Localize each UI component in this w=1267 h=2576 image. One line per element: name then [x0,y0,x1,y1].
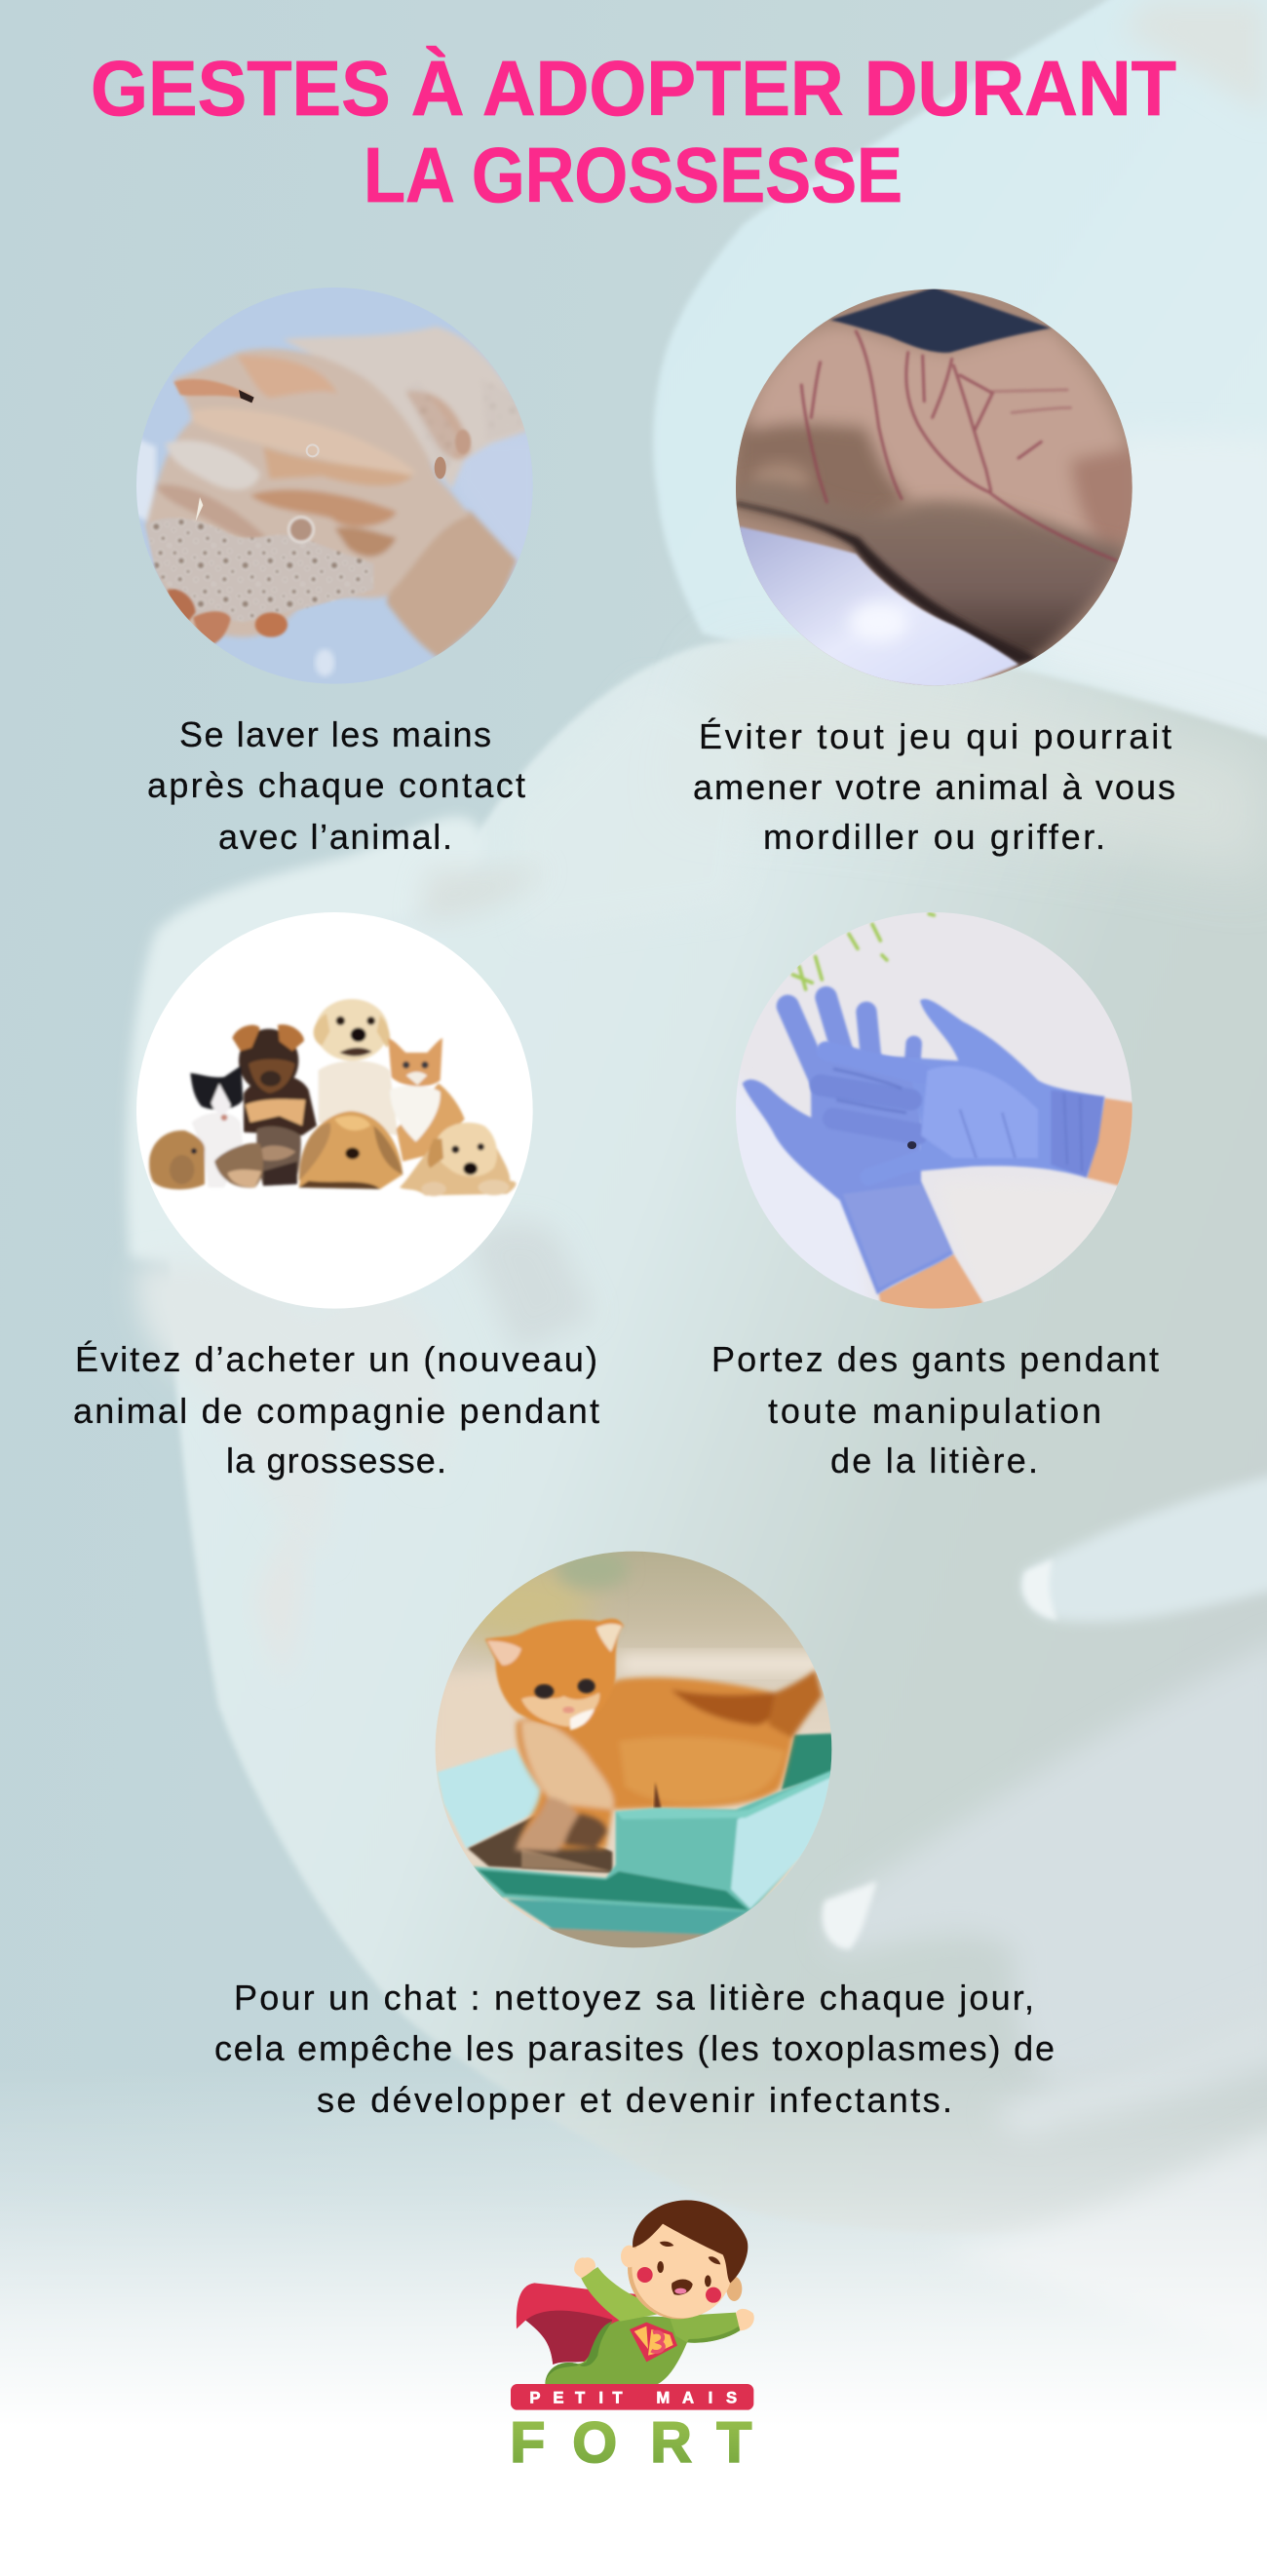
caption: après chaque contact [147,765,525,805]
emblem [630,2323,677,2362]
soap bubbles [146,518,373,622]
black and white kitten [190,1065,244,1187]
box back [782,1733,835,1790]
panel: avoid scratches [693,278,1175,857]
panel: wear gloves [711,902,1159,1480]
panel: no new pet [73,902,599,1480]
photo: kitten in litter box [435,1552,832,1947]
caption [711,1339,1159,1480]
background: left hand on belly [127,817,595,1686]
tabby kittens [214,1127,301,1188]
title: GESTES À ADOPTER DURANT [91,45,1176,132]
cat [388,1038,465,1162]
brand pill: PETIT MAIS [529,2388,737,2406]
caption: cela empêche les parasites (les toxoplasmes) de [214,2028,1055,2068]
lab puppy [314,999,398,1135]
photo: blue gloves [736,912,1133,1309]
background: right hand fingers [823,1472,1267,2135]
caption: Éviter tout jeu qui pourrait [699,716,1171,756]
caption: Pour un chat : nettoyez sa litière chaque jour, [234,1978,1034,2018]
photo: scratched arm [736,288,1133,686]
head [621,2200,748,2319]
caption: Se laver les mains [179,714,491,754]
brand name: FORT [510,2411,751,2475]
logo: Petit mais Fort [510,2200,754,2475]
arms [879,1254,986,1314]
caption: se développer et devenir infectants. [317,2080,952,2120]
caption [147,714,525,857]
caption: avec l’animal. [218,817,452,857]
caption: mordiller ou griffer. [763,817,1105,857]
left glove [743,997,953,1294]
caption: la grossesse. [226,1441,446,1480]
caption [73,1339,599,1480]
title [91,45,1176,218]
caption [693,716,1175,857]
panel: wash hands [127,278,546,857]
hands [574,2257,754,2330]
kitten [515,1670,822,1852]
cape [517,2283,638,2365]
photo: soapy hands [136,288,532,684]
photo: group of pets [136,912,533,1308]
caption: Portez des gants pendant [711,1339,1159,1379]
body [545,2267,741,2384]
box front [473,1769,835,1952]
guinea pig [149,1131,205,1189]
caption: amener votre animal à vous [693,767,1175,807]
caption [214,1978,1055,2120]
title: LA GROSSESSE [364,132,902,218]
caption: Évitez d’acheter un (nouveau) [75,1339,597,1379]
golden puppy [400,1123,516,1196]
right glove [821,999,1104,1177]
caption: de la litière. [830,1441,1038,1480]
panel: clean litter [214,1540,1055,2120]
brand pill [511,2384,753,2410]
caption: toute manipulation [768,1391,1101,1431]
rabbit [299,1111,403,1189]
scratches [801,331,1116,560]
shepherd puppy [232,1024,317,1135]
caption: animal de compagnie pendant [73,1391,599,1431]
sprigs [792,914,934,989]
